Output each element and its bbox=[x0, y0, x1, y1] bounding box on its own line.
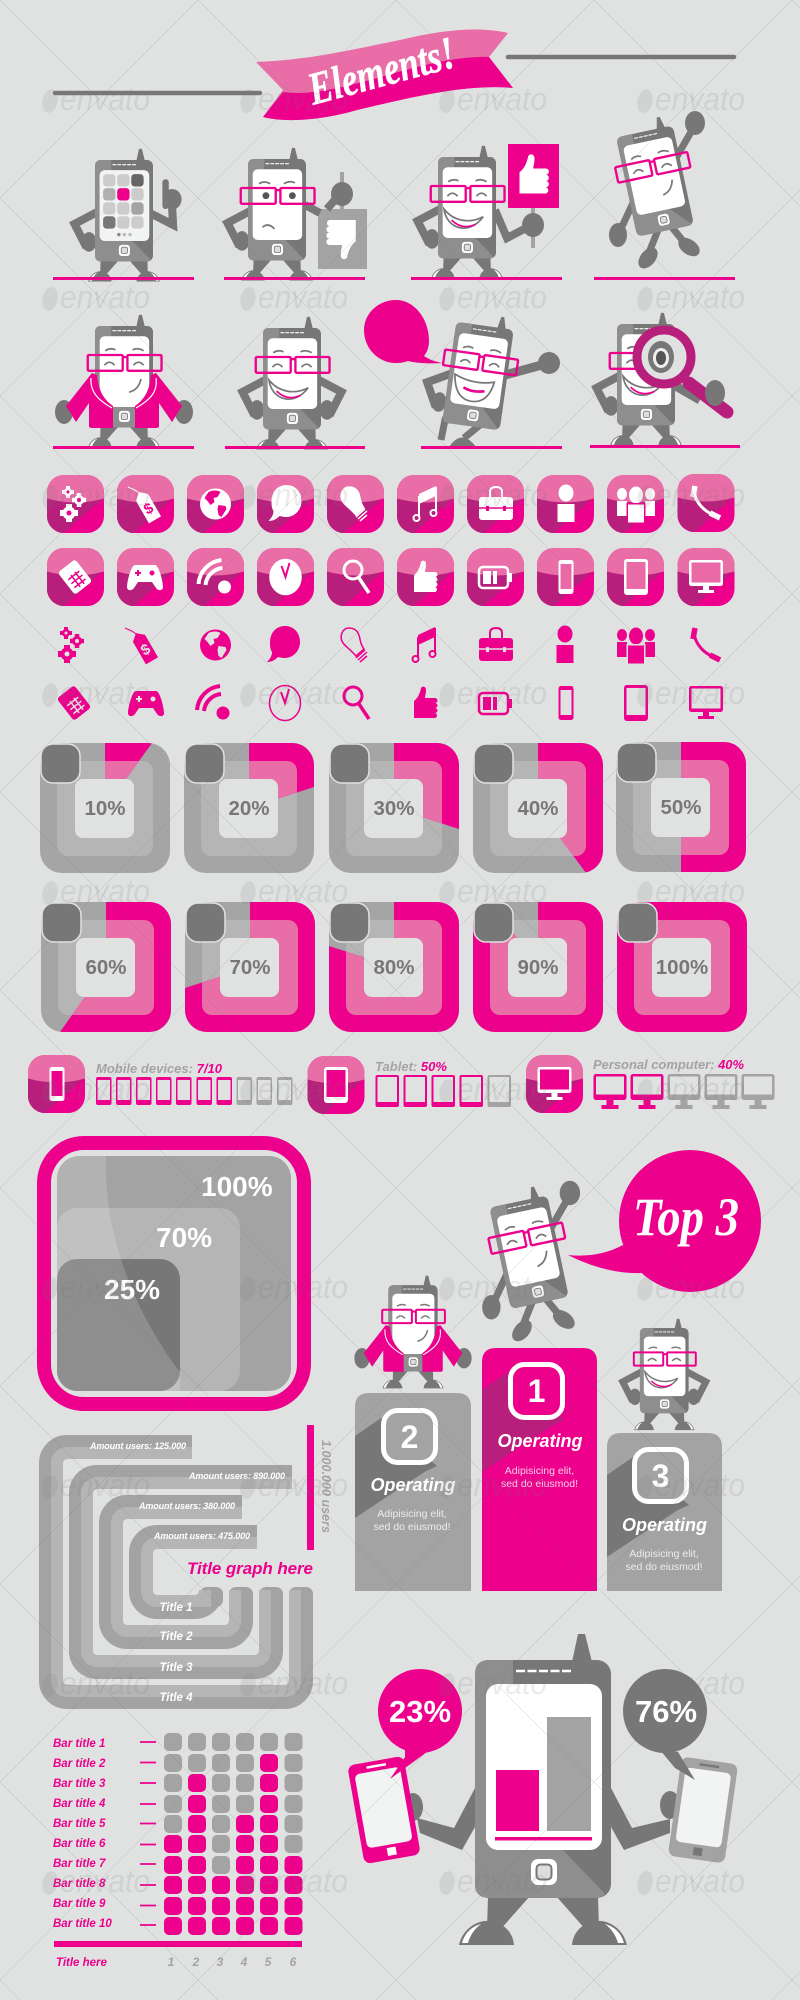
nested squares chart: 70% bbox=[156, 1222, 212, 1253]
scale bar with total users: 1.000.000 users bbox=[319, 1440, 333, 1533]
row labels: Bar title 5 bbox=[53, 1818, 106, 1830]
row labels: Bar title 9 bbox=[53, 1898, 106, 1910]
podium 3: 3 bbox=[652, 1458, 669, 1494]
row labels bbox=[53, 1738, 112, 1930]
nested squares chart bbox=[44, 1143, 304, 1404]
top 3 speech bubble bbox=[568, 1150, 761, 1292]
speech bubble bbox=[364, 300, 443, 363]
concentric bar chart: Amount users: 125.000 bbox=[89, 1441, 186, 1451]
plain pink icons row 1 bbox=[58, 626, 720, 664]
podium 2: Adipisicing elit, bbox=[377, 1508, 447, 1520]
title banner: Elements! bbox=[302, 27, 460, 115]
percent tile 70%: 70% bbox=[229, 956, 271, 979]
percent tile 70% bbox=[185, 902, 315, 1032]
progress row: personal computer: Personal computer: 40% bbox=[593, 1058, 744, 1072]
character: phone in jacket bbox=[53, 315, 194, 449]
character: thumbs up bbox=[411, 144, 562, 280]
podium 1 bbox=[482, 1348, 597, 1591]
percent tile 90% bbox=[473, 902, 603, 1032]
percent tile 60% bbox=[41, 902, 171, 1032]
axis labels: 3 bbox=[217, 1955, 224, 1969]
pink cells bbox=[164, 1754, 302, 1935]
chart title: Title graph here bbox=[187, 1559, 313, 1578]
percent tile 50%: 50% bbox=[660, 796, 702, 819]
percent tile 80%: 80% bbox=[373, 956, 415, 979]
podium 2: Operating bbox=[370, 1475, 456, 1495]
podium 2 bbox=[355, 1393, 471, 1591]
row labels: Bar title 1 bbox=[53, 1738, 105, 1750]
character: phone showing app grid bbox=[53, 149, 194, 282]
percent tile 30% bbox=[329, 743, 459, 873]
percent tile 80% bbox=[329, 902, 459, 1032]
percent tile 20% bbox=[184, 743, 314, 873]
title banner bbox=[55, 27, 734, 120]
top 3 speech bubble: Top 3 bbox=[633, 1187, 739, 1247]
character: smiling phone on third place bbox=[623, 1319, 706, 1430]
icon tiles row 2 bbox=[42, 543, 740, 606]
axis bar bbox=[54, 1941, 302, 1947]
arms bbox=[417, 1788, 670, 1850]
percent tile 10%: 10% bbox=[84, 797, 126, 820]
concentric bar chart: Amount users: 890.000 bbox=[188, 1471, 285, 1481]
percent tile 30%: 30% bbox=[373, 797, 415, 820]
character: phone with magnifier bbox=[590, 313, 740, 448]
podium 1: Adipisicing elit, bbox=[505, 1465, 574, 1477]
podium 1: sed do eiusmod! bbox=[501, 1478, 578, 1490]
plain pink icons row 2 bbox=[57, 685, 723, 721]
bubble 23%: 23% bbox=[389, 1694, 451, 1729]
axis labels bbox=[56, 1955, 297, 1969]
percent tile 90%: 90% bbox=[517, 956, 559, 979]
grey cells bbox=[164, 1733, 302, 1874]
row labels: Bar title 3 bbox=[53, 1778, 106, 1790]
row labels: Bar title 6 bbox=[53, 1838, 106, 1850]
progress row: mobile devices bbox=[23, 1050, 292, 1113]
axis labels: 1 bbox=[168, 1955, 175, 1969]
concentric bar chart: Title 1 bbox=[159, 1602, 193, 1614]
row labels: Bar title 7 bbox=[53, 1858, 106, 1870]
progress row: personal computer bbox=[521, 1050, 774, 1113]
progress row: tablet bbox=[302, 1051, 511, 1114]
nested squares chart: 100% bbox=[201, 1171, 273, 1202]
axis labels: 2 bbox=[192, 1955, 200, 1969]
character: talking phone bbox=[421, 308, 562, 449]
progress row: tablet: Tablet: 50% bbox=[375, 1060, 447, 1074]
podium 3 bbox=[607, 1433, 722, 1591]
axis labels: 6 bbox=[290, 1955, 297, 1969]
podium 3: Adipisicing elit, bbox=[629, 1548, 699, 1560]
bubble 76%: 76% bbox=[635, 1694, 697, 1729]
podium 3: sed do eiusmod! bbox=[625, 1561, 703, 1573]
row labels: Bar title 10 bbox=[53, 1918, 112, 1930]
percent tile 40% bbox=[473, 743, 603, 873]
axis labels: 5 bbox=[265, 1955, 272, 1969]
phone body bbox=[459, 1634, 627, 1945]
concentric bar chart: Amount users: 380.000 bbox=[138, 1501, 235, 1511]
podium 2: 2 bbox=[401, 1419, 418, 1455]
concentric bar chart: Amount users: 475.000 bbox=[153, 1531, 250, 1541]
character: jumping phone above first place bbox=[480, 1181, 580, 1345]
screen bar chart bbox=[495, 1717, 592, 1840]
percent tile 100% bbox=[617, 902, 747, 1032]
grey handset held right bbox=[668, 1757, 738, 1863]
percent tile 100%: 100% bbox=[656, 956, 708, 979]
concentric bar chart: Title 2 bbox=[159, 1631, 193, 1643]
podium 1: 1 bbox=[528, 1373, 545, 1409]
big phone character with bar chart bbox=[403, 1634, 680, 1945]
percent tile 50% bbox=[616, 742, 746, 872]
axis labels: Title here bbox=[56, 1957, 108, 1969]
icon tiles row 1 bbox=[42, 469, 740, 533]
podium 3: Operating bbox=[622, 1515, 707, 1535]
character: jacket phone on second place bbox=[354, 1276, 472, 1388]
axis labels: 4 bbox=[240, 1955, 248, 1969]
row labels: Bar title 8 bbox=[53, 1878, 106, 1890]
bubble 23% bbox=[378, 1669, 462, 1779]
nested squares chart: 25% bbox=[104, 1274, 160, 1305]
percent tile 40%: 40% bbox=[517, 797, 559, 820]
row labels: Bar title 4 bbox=[53, 1798, 106, 1810]
progress row: mobile devices: Mobile devices: 7/10 bbox=[96, 1062, 222, 1076]
podium 2: sed do eiusmod! bbox=[373, 1521, 451, 1533]
row ticks bbox=[140, 1742, 156, 1925]
podium 1: Operating bbox=[497, 1431, 583, 1451]
character: thumbs down bbox=[224, 148, 367, 281]
concentric bar chart: Title 3 bbox=[159, 1662, 193, 1674]
character: smiling phone bbox=[225, 317, 365, 450]
pink handset held left bbox=[347, 1756, 421, 1864]
bubble 76% bbox=[623, 1669, 707, 1780]
row labels: Bar title 2 bbox=[53, 1758, 106, 1770]
percent tile 10% bbox=[40, 743, 170, 873]
concentric bar chart bbox=[51, 1441, 313, 1704]
percent tile 20%: 20% bbox=[228, 797, 270, 820]
character: jumping phone bbox=[594, 111, 735, 280]
percent tile 60%: 60% bbox=[85, 956, 127, 979]
concentric bar chart: Title 4 bbox=[159, 1692, 193, 1704]
scale bar with total users bbox=[307, 1425, 333, 1550]
dot matrix chart bbox=[53, 1733, 302, 1969]
